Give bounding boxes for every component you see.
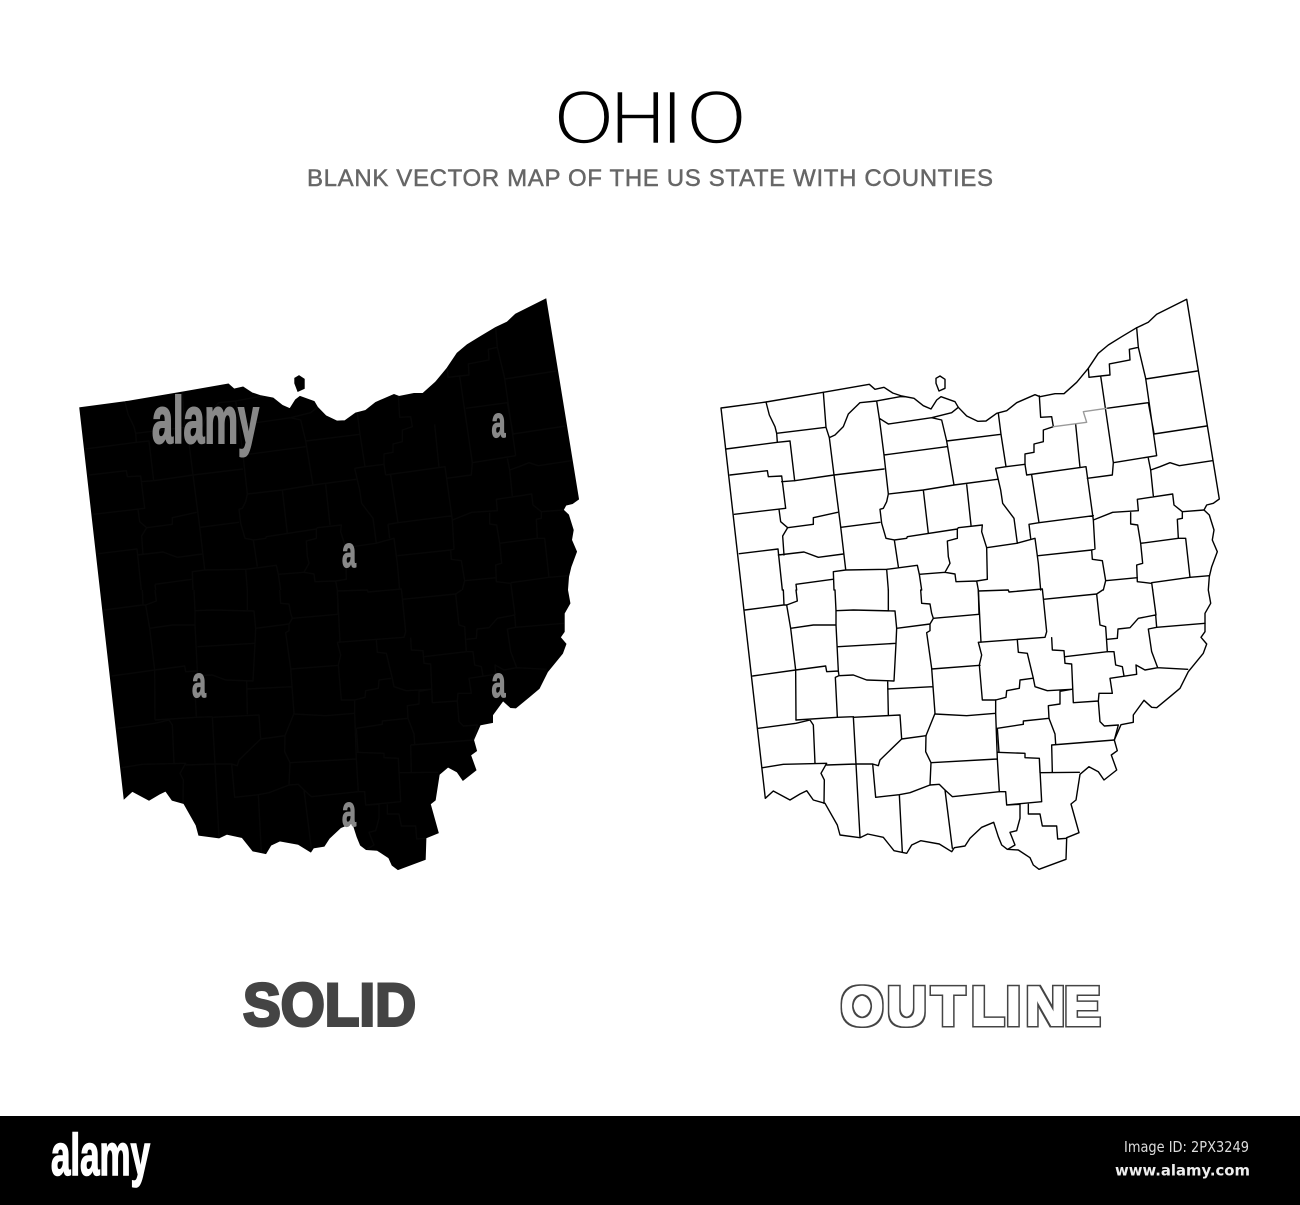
title: OHIO <box>554 75 746 161</box>
county lines south <box>745 589 1205 852</box>
state border outline <box>721 299 1219 869</box>
county lines north <box>726 328 1212 590</box>
watermark letter: a <box>492 658 506 707</box>
footer bar <box>0 1116 1300 1205</box>
image id: Image ID: 2PX3249 <box>1124 1138 1249 1156</box>
watermark: alamy on solid map <box>152 383 506 836</box>
watermark letter: a <box>492 398 506 447</box>
county line crossing the watermark <box>1053 408 1107 427</box>
label: solid: SOLID <box>243 972 416 1038</box>
watermark letter: a <box>342 528 356 577</box>
website: www.alamy.com <box>1115 1162 1250 1180</box>
watermark letter: a <box>192 658 206 707</box>
faint county lines on silhouette <box>85 328 571 852</box>
panel: outline map of Ohio with counties <box>721 299 1219 869</box>
panel: solid map of Ohio <box>80 299 578 869</box>
watermark letter: a <box>342 787 356 836</box>
solid island <box>295 376 304 391</box>
footer logo: alamy <box>51 1123 150 1188</box>
lake erie island <box>936 376 945 391</box>
subtitle: BLANK VECTOR MAP OF THE US STATE WITH COUNTIES <box>307 165 993 192</box>
solid state silhouette <box>80 299 578 869</box>
label: outline: OUTLINE <box>841 975 1101 1037</box>
watermark word: alamy <box>152 383 259 457</box>
